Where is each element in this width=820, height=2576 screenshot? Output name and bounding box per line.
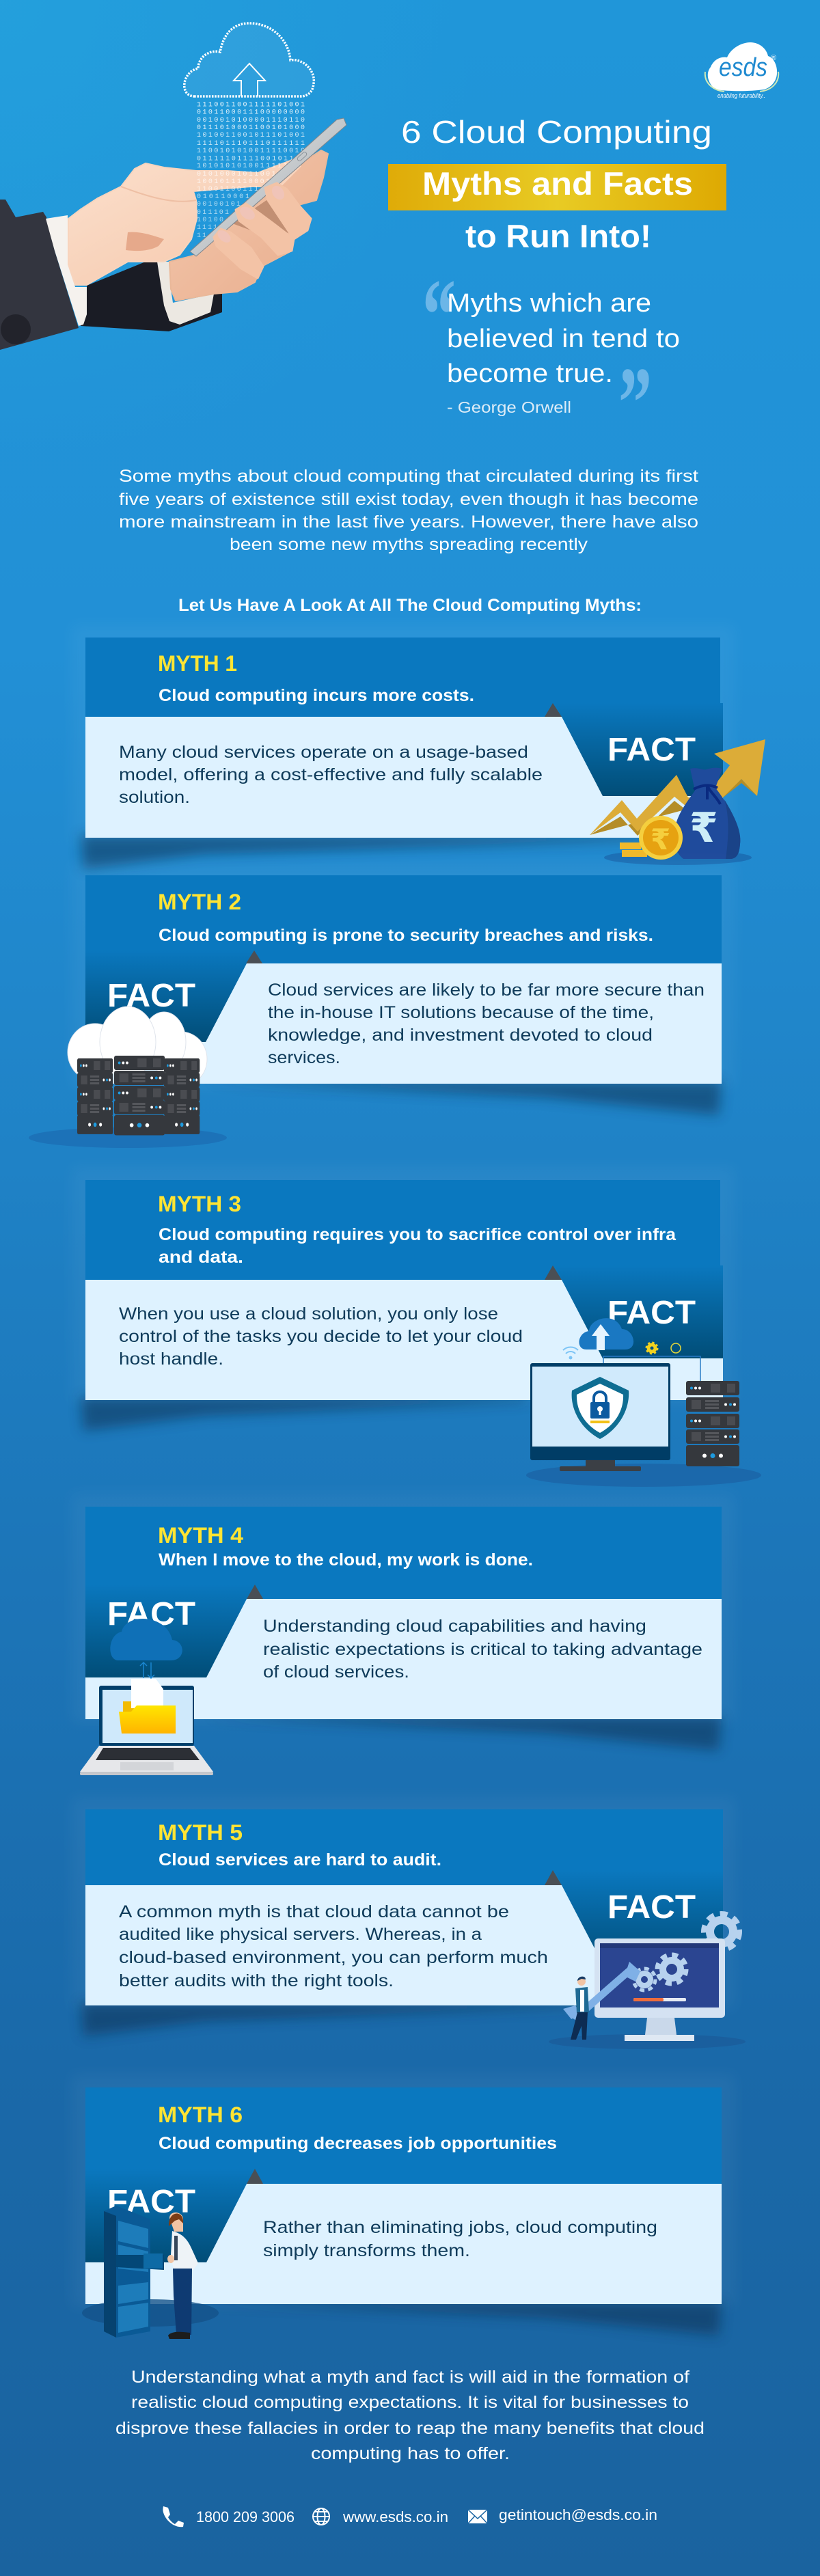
logo: esds (705, 42, 778, 99)
section heading: Let Us Have A Look At All The Cloud Computing Myths: (178, 596, 642, 615)
title: to Run Into! (465, 218, 651, 254)
fact body: knowledge, and investment devoted to cloud (268, 1026, 653, 1045)
myth header: MYTH 4 (158, 1523, 243, 1548)
myth header: MYTH 6 (158, 2102, 243, 2127)
binary data stream: 0111010001100101000 (197, 124, 305, 132)
fact tab: FACT (607, 1889, 696, 1926)
myth header (85, 1507, 722, 1599)
binary data stream (197, 101, 305, 240)
closing paragraph: realistic cloud computing expectations. It is vital for businesses to (131, 2393, 689, 2412)
quote: become true. (447, 359, 613, 388)
fact tab (85, 2169, 263, 2262)
fact body: model, offering a cost-effective and fully scalable (119, 765, 543, 784)
binary data stream: 1001011110001 (197, 178, 270, 186)
panel: myth 3 (72, 1167, 761, 1487)
icon: growth arrow and money: ₹ (689, 804, 718, 852)
closing paragraph: Understanding what a myth and fact is will aid in the formation of (131, 2368, 689, 2387)
rear suit sleeve (81, 262, 222, 331)
fact body (85, 963, 722, 1084)
icon: monitor with gears and engineer (549, 1914, 746, 2049)
icon: secured monitor, cloud and server (526, 1318, 761, 1487)
fact body (85, 2184, 722, 2304)
binary data stream: 010100010110011 (197, 171, 282, 178)
intro paragraph: more mainstream in the last five years. However, there have also (119, 512, 698, 532)
myth header: and data. (159, 1248, 243, 1267)
binary data stream: 11 (197, 232, 206, 240)
fact body: audited like physical servers. Whereas, in a (119, 1925, 482, 1944)
binary data stream: 1111 (197, 224, 217, 232)
panel: myth 5 (72, 1797, 746, 2049)
binary data stream: 011111011110010111 (197, 156, 299, 163)
fact tab (545, 703, 723, 796)
logo: esds: esds (719, 53, 767, 82)
fact body: control of the tasks you decide to let your cloud (119, 1327, 523, 1346)
myth header (85, 875, 722, 963)
icon: growth arrow and money: ₹ (651, 823, 670, 856)
intro paragraph: five years of existence still exist today, even though it has become (119, 490, 698, 509)
fact tab: FACT (107, 2184, 195, 2220)
icon: data cloud (184, 23, 314, 96)
fact tab (85, 950, 262, 1042)
myth header: When I move to the cloud, my work is done. (159, 1550, 533, 1570)
title: 6 Cloud Computing (401, 114, 712, 150)
fact tab: FACT (107, 1596, 195, 1632)
quote: - George Orwell (447, 398, 571, 416)
rear hand (169, 150, 328, 301)
myth header (85, 1809, 723, 1885)
logo: esds: enabling futurability.. (718, 92, 765, 99)
title (388, 114, 726, 254)
contact bar: 1800 209 3006 (196, 2508, 295, 2525)
fact tab: FACT (607, 732, 696, 768)
panel: myth 2 (29, 862, 735, 1148)
fingers (214, 183, 311, 278)
title: Myths and Facts (422, 165, 693, 202)
contact bar (163, 2506, 657, 2527)
fact body: realistic expectations is critical to taking advantage (263, 1640, 702, 1659)
fact body (85, 1599, 722, 1719)
myth header: Cloud computing decreases job opportunities (159, 2134, 557, 2153)
panel: myth 6 (72, 2074, 735, 2339)
fact body: Many cloud services operate on a usage-based (119, 743, 528, 762)
closing paragraph: computing has to offer. (311, 2444, 510, 2463)
fact body: When you use a cloud solution, you only lose (119, 1304, 498, 1324)
intro paragraph: Some myths about cloud computing that circulated during its first (119, 467, 698, 486)
intro paragraph: been some new myths spreading recently (230, 535, 588, 554)
fact tab (85, 1585, 263, 1677)
icon: cloud file transfer to laptop (80, 1619, 213, 1775)
myth header: Cloud computing incurs more costs. (159, 686, 474, 705)
binary data stream: 1111011101110111111 (197, 140, 305, 148)
fact body (85, 717, 723, 838)
binary data stream: 010110001 (197, 193, 249, 201)
binary data stream: 10100 (197, 217, 223, 224)
fact body (85, 1280, 723, 1400)
rear shirt cuff (157, 262, 214, 325)
myth header: Cloud computing is prone to security breaches and risks. (159, 926, 653, 945)
myth header (85, 638, 720, 717)
contact bar: www.esds.co.in (342, 2508, 448, 2525)
front hand (68, 159, 301, 285)
fact body: cloud-based environment, you can perform much (119, 1948, 548, 1967)
fact body: Rather than eliminating jobs, cloud computing (263, 2218, 657, 2237)
binary data stream: 011101 (197, 209, 229, 217)
fact tab (545, 1265, 723, 1358)
fact body: services. (268, 1048, 340, 1067)
fact tab: FACT (107, 978, 195, 1014)
intro paragraph (119, 467, 698, 554)
logo: esds: ® (771, 54, 776, 62)
binary data stream: 1010011001011101001 (197, 132, 305, 139)
closing paragraph: disprove these fallacies in order to reap the many benefits that cloud (115, 2419, 705, 2438)
myth header: MYTH 1 (158, 651, 237, 676)
binary data stream: 10101010100111111 (197, 163, 293, 170)
fact body: Understanding cloud capabilities and having (263, 1617, 646, 1636)
quote: ” (618, 346, 652, 460)
fingernails (215, 183, 287, 245)
contact bar: getintouch@esds.co.in (499, 2506, 657, 2523)
fact body (85, 1885, 605, 2005)
fact body: A common myth is that cloud data cannot be (119, 1902, 509, 1921)
fact body: of cloud services. (263, 1662, 409, 1682)
quote: believed in tend to (447, 325, 680, 353)
myth header (85, 2087, 722, 2184)
palm shadow (232, 193, 296, 234)
fact tab: FACT (607, 1295, 696, 1331)
fact body: Cloud services are likely to be far more secure than (268, 981, 705, 1000)
quote: “ (422, 258, 456, 372)
quote: Myths which are (447, 289, 651, 318)
myth header: Cloud services are hard to audit. (159, 1850, 441, 1869)
suit button (1, 314, 31, 344)
binary data stream: 11001100111 (197, 186, 258, 193)
fact body: simply transforms them. (263, 2241, 470, 2260)
front shirt cuff (46, 215, 87, 326)
myth header: MYTH 5 (158, 1820, 243, 1845)
smartphone (190, 118, 346, 256)
myth header (85, 1180, 720, 1280)
myth header: Cloud computing requires you to sacrifice control over infra (159, 1225, 676, 1244)
front suit sleeve (0, 200, 79, 350)
icon: growth arrow and money (590, 739, 765, 865)
fact body: better audits with the right tools. (119, 1971, 394, 1990)
fact tab (545, 1870, 723, 1968)
icon: engineer at server rack (82, 2206, 219, 2339)
fact body: host handle. (119, 1349, 223, 1369)
binary data stream: 1100101010011110010 (197, 148, 305, 155)
icon: cloud and server stack (29, 1006, 227, 1148)
binary data stream: 00100101 (197, 201, 241, 208)
panel: myth 4 (72, 1494, 735, 1775)
hero illustration: hand holding phone with data cloud (0, 23, 346, 350)
myth header: MYTH 2 (158, 890, 241, 914)
binary data stream: 0010010100001110110 (197, 117, 305, 124)
icon: globe (313, 2508, 329, 2525)
icon: envelope (468, 2510, 487, 2523)
fact body: the in-house IT solutions because of the time, (268, 1003, 654, 1022)
title highlight bar (388, 164, 726, 210)
icon: phone (163, 2506, 184, 2527)
myth header: MYTH 3 (158, 1192, 241, 1216)
binary data stream: 0101100011100000000 (197, 109, 305, 117)
binary data stream: 1110011001111101001 (197, 101, 305, 109)
closing paragraph (115, 2368, 705, 2463)
panel: myth 1 (72, 625, 765, 869)
fact body: solution. (119, 788, 190, 807)
quote (422, 258, 680, 460)
